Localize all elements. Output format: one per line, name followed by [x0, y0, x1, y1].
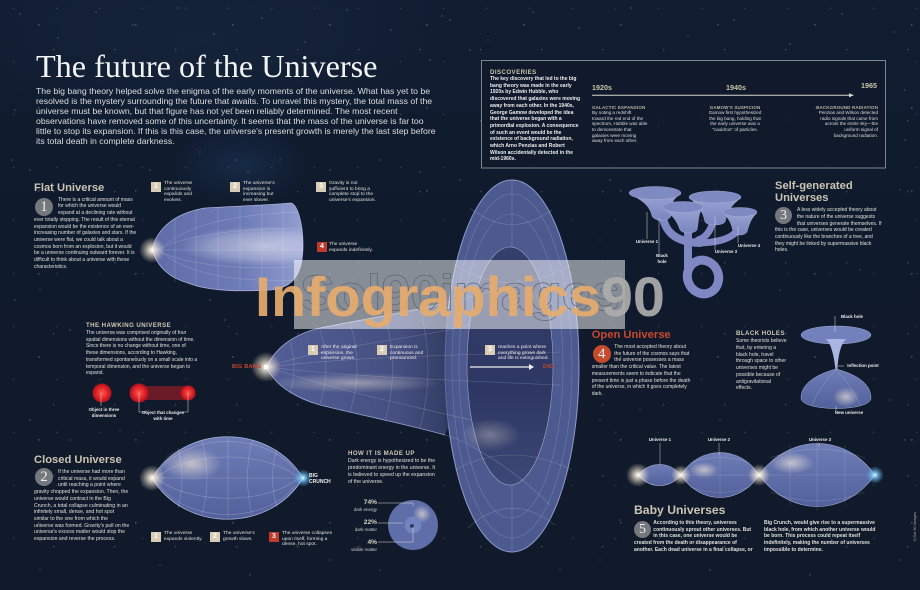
discoveries text	[490, 76, 580, 162]
flat text: There is a critical amount of mass	[58, 197, 133, 203]
galactic expansion	[592, 104, 648, 143]
intro text: The big bang theory helped solve the enigma of the early moments of the universe. What has yet to be	[36, 86, 430, 96]
flat universe diagram	[140, 202, 304, 292]
step 2 text: The universe's	[223, 531, 255, 536]
hawking text: temporal dimension, and the universe began to	[86, 364, 190, 370]
text: Some theorists believe	[736, 338, 787, 344]
text: antigravitational	[736, 378, 771, 384]
step 4 text: The universe	[329, 242, 357, 247]
big crunch label: BIG	[309, 473, 318, 479]
column 2: impossible to determine.	[764, 547, 823, 553]
universe 3: Universe 3	[809, 437, 831, 442]
stat 22: 22%	[364, 519, 377, 526]
black hole	[656, 253, 668, 264]
galactic expansion: spectrum, Hubble was able	[592, 121, 647, 126]
label: object that changes: with time	[153, 416, 173, 420]
text: dark.	[592, 391, 603, 397]
flat text: increasing number of galaxies and stars. If the	[34, 230, 136, 236]
gamow's suspicion: GAMOW'S SUSPICION	[710, 104, 760, 110]
panel: black holes text	[736, 330, 794, 392]
discoveries text: Wilson accidentally detected in the	[490, 150, 573, 156]
text: the universe possesses a mass	[614, 357, 684, 363]
panel: open universe text	[592, 329, 690, 397]
text: effects.	[736, 385, 752, 391]
flat text: expansion would be the existence of an ever-	[34, 224, 134, 230]
text: of the universe.	[348, 479, 383, 485]
galactic expansion: galaxies were moving	[592, 133, 636, 138]
step 1: 1	[154, 183, 158, 190]
step 4: 4	[320, 243, 324, 250]
hawking objects	[92, 384, 196, 412]
universe 1: Universe 1	[636, 239, 658, 244]
discoveries text: away from each other. In the 1940s,	[490, 103, 574, 109]
intro text: observations have removed some of this uncertainty. It seems that the mass of the universe is far too	[36, 116, 424, 126]
label: object that changes	[142, 410, 184, 420]
title: The future of the Universe	[36, 48, 377, 84]
step 2: 2	[233, 183, 237, 190]
flat text: characteristics.	[34, 264, 67, 270]
text: is believed to speed up the expansion	[348, 472, 435, 478]
end label: END	[543, 364, 554, 370]
discoveries text: bang theory was made in the early	[490, 83, 572, 89]
step 2 text	[223, 530, 255, 542]
text: Dark energy is hypothesized to be the	[348, 458, 435, 464]
heading: HOW IT IS MADE UP	[348, 450, 415, 457]
step 2	[230, 182, 240, 192]
arrow: open universe timeline	[470, 364, 534, 370]
closed heading: Closed Universe	[34, 454, 122, 466]
text: they might be linked by supermassive black	[775, 241, 871, 247]
stat 22	[354, 519, 377, 532]
column 2: be born. This process could repeat itself	[764, 533, 860, 539]
panel: closed universe text	[34, 454, 129, 542]
credit: ©Sol 90 Images	[912, 512, 917, 543]
flat text: difficult to think about a universe with these	[34, 257, 129, 263]
closed text: universe was formed. Gravity's pull on the	[34, 523, 129, 529]
gamow's suspicion	[708, 104, 762, 132]
step 3 text: dense, hot spot.	[282, 542, 317, 547]
universe 1: Universe 1	[649, 437, 671, 442]
step 2 text: Expansion is	[390, 345, 418, 350]
hawking text: The universe was comprised originally of four	[86, 330, 186, 336]
step 1 text	[164, 530, 203, 542]
stat 74: 74%	[364, 498, 377, 506]
universe 3: Universe 3	[715, 249, 737, 254]
column 1: in this case, one universe would be	[653, 533, 737, 539]
column 1: According to this theory, universes	[653, 520, 737, 526]
text: universes might be	[736, 365, 778, 371]
text: of the universe, in which it goes completely	[592, 384, 687, 390]
step 1	[151, 532, 161, 542]
step 1: 1	[154, 533, 158, 540]
panel: baby universes text	[634, 504, 884, 554]
composition sphere	[378, 500, 438, 550]
text: through space to other	[736, 358, 786, 364]
step 3: 3	[488, 346, 492, 353]
step 4	[317, 242, 327, 252]
step 3 text	[282, 530, 332, 547]
step 3 text: sufficient to bring a	[329, 187, 370, 192]
closed text	[34, 469, 129, 542]
intro text: universe must be known, but that figure has not yet been reliably determined. The most recent	[36, 106, 398, 116]
intro text: its total death in complete darkness.	[36, 136, 175, 146]
background radiation: across the entire sky—the	[825, 121, 878, 126]
step 2 text: ever slower.	[243, 198, 269, 203]
self-generated universes diagram	[629, 186, 757, 298]
discoveries text: existence of background radiation,	[490, 136, 573, 142]
step 2 text: increasing but	[243, 192, 273, 197]
stat 74	[354, 498, 377, 512]
step 4 text	[329, 242, 373, 253]
number 1: 1	[40, 199, 48, 215]
step 2 text: growth slows.	[223, 537, 253, 542]
step 3 text: Gravity is not	[329, 181, 358, 186]
heading	[775, 180, 853, 204]
hawking text: these dimensions, according to Hawking,	[86, 350, 177, 356]
text: predominant energy in the universe. It	[348, 465, 435, 471]
flat text: ever totally stopping. The result of this eternal	[34, 217, 135, 223]
self-generated diagram labels	[636, 239, 760, 264]
galactic expansion: toward the red end of the	[592, 116, 643, 121]
step 3 text: and life is extinguished.	[498, 356, 549, 361]
step 1 text: expands and	[164, 192, 192, 197]
number 5: 5	[639, 522, 646, 537]
step 3 text: reaches a point where	[498, 345, 546, 350]
number 5	[634, 521, 651, 538]
black hole labels	[830, 313, 890, 417]
discoveries text: mid-1960s.	[490, 156, 516, 162]
hawking heading: THE HAWKING UNIVERSE	[86, 322, 171, 329]
gamow's suspicion: "cauldron" of particles.	[712, 127, 758, 132]
panel: how it is made up	[348, 450, 436, 552]
step 2 text	[390, 344, 423, 361]
baby universes diagram	[626, 440, 884, 510]
closed steps	[151, 530, 332, 547]
baby universes labels	[640, 437, 840, 443]
text: that, by entering a	[736, 345, 776, 351]
background radiation: background radiation.	[834, 133, 878, 138]
step 1 text: evolves.	[164, 198, 182, 203]
big bang label: BIG BANG	[232, 364, 262, 370]
number 4	[593, 345, 611, 363]
black hole: Black hole	[841, 314, 863, 319]
panel: flat universe text	[34, 182, 136, 270]
closed text: universe's excess matter would stop the	[34, 529, 125, 535]
galactic expansion: GALACTIC EXPANSION	[592, 104, 645, 110]
heading: Universes	[775, 192, 828, 204]
column 1: continuously sprout other universes. But	[653, 527, 751, 533]
black hole: Black	[656, 253, 668, 258]
open universe steps	[308, 344, 549, 361]
closed text: Crunch, a total collapse culminating in an	[34, 503, 128, 509]
step 2 text	[243, 180, 275, 203]
label: object in three dimensions	[88, 407, 120, 418]
step 1	[151, 182, 161, 192]
column 1	[634, 520, 753, 554]
year 1920s: 1920s	[592, 82, 612, 92]
stat 74: dark energy	[354, 506, 377, 512]
galactic expansion: to demonstrate that	[592, 127, 632, 132]
closed text: similar to the one from which the	[34, 516, 108, 522]
step 3 text	[498, 344, 549, 361]
step 3: 3	[319, 183, 323, 190]
text: continuously like the branches of a tree, and	[775, 234, 873, 240]
closed text: If the universe had more than	[58, 469, 125, 475]
step 1 text: The universe	[164, 181, 192, 186]
discoveries text: 1920s by Edwin Hubble, who	[490, 89, 558, 95]
galactic expansion: away from each other.	[592, 138, 637, 143]
discoveries heading: DISCOVERIES	[490, 68, 537, 76]
intro text: resolved is the mystery surrounding the future that awaits. To unravel this mystery, the total mass of the	[36, 96, 432, 106]
background radiation: radio signals that came from	[820, 116, 878, 121]
closed text: universe would contract in the Big	[34, 496, 111, 502]
column 1: created from the death or disappearance of	[634, 540, 737, 546]
column 2	[764, 520, 875, 554]
galactic expansion: By noting a redshift	[592, 110, 631, 115]
step 1: 1	[311, 346, 315, 353]
black hole diagram	[801, 316, 871, 411]
background radiation: uniform signal of	[844, 127, 878, 132]
step 3 text	[329, 180, 376, 203]
text: The most accepted theory about	[614, 344, 686, 350]
number 2: 2	[40, 469, 48, 485]
number 3	[775, 207, 792, 224]
step 2 text: expansion is	[243, 187, 270, 192]
stat 4: 4%	[367, 538, 377, 546]
text: this is the case, universes would be created	[775, 227, 872, 233]
step 2	[210, 532, 220, 542]
step 3: 3	[272, 533, 276, 540]
text: present time is just a phase before the death	[592, 378, 690, 384]
gamow's suspicion: the big bang, holding that	[709, 116, 761, 121]
panel: hawking universe	[86, 322, 198, 420]
text	[348, 458, 436, 485]
step 3	[316, 182, 326, 192]
step 3 text: complete stop to the	[329, 192, 373, 197]
number 4: 4	[598, 346, 605, 362]
step 4 text: expands indefinitely.	[329, 248, 373, 253]
intro text	[36, 86, 436, 146]
step 1 text: expands violently.	[164, 537, 203, 542]
timeline arrow	[592, 93, 854, 97]
big crunch label: CRUNCH	[309, 479, 331, 485]
closed text: expansion and reverse the process.	[34, 536, 115, 542]
closed text: until reaching a point where	[58, 482, 121, 488]
flat steps	[151, 180, 376, 253]
closed universe diagram	[139, 437, 312, 519]
column 1: another. Each dead universe in a final collapse, or	[634, 547, 753, 553]
column 2: indefinitely, making the number of universes	[764, 540, 870, 546]
text: measurements seem to indicate that the	[592, 371, 681, 377]
hawking text: Since there is no change without time, one of	[86, 343, 186, 349]
text: A less widely accepted theory about	[797, 207, 876, 213]
text	[775, 207, 882, 253]
discoveries text: primordial explosion. A consequence	[490, 123, 579, 129]
label: object in three dimensions: Object in three	[89, 407, 119, 412]
gamow's suspicion: Gamow first hypothesized	[709, 110, 761, 115]
universe 2: Universe 2	[708, 437, 730, 442]
heading: Self-generated	[775, 180, 853, 192]
text: smaller than the critical value. The latest	[592, 364, 681, 370]
step 1	[308, 345, 318, 355]
text: that universes generate themselves. If	[797, 221, 882, 227]
closed text: gravity chopped the expansion. Then, the	[34, 489, 128, 495]
step 3	[485, 345, 495, 355]
text: black hole, travel	[736, 352, 774, 358]
label: object in three dimensions: dimensions	[92, 412, 116, 418]
stat 22: dark matter	[355, 527, 377, 532]
step 2 text: The universe's	[243, 181, 275, 186]
step 1 text: continuously	[164, 187, 191, 192]
hawking text: spatial dimensions without the dimension of time.	[86, 337, 195, 343]
step 3 text: universe's expansion.	[329, 198, 376, 203]
panel: self-generated universes text	[775, 180, 882, 253]
step 1 text: universe grows.	[321, 356, 355, 361]
discoveries text: George Gamow developed the idea	[490, 110, 573, 116]
discoveries text: that the universe began with a	[490, 116, 562, 122]
panel: discoveries	[490, 68, 878, 162]
text: possible because of	[736, 372, 780, 378]
hawking text: transformed spontaneously on a small scale into a	[86, 357, 197, 363]
inflection point: Inflection point	[847, 363, 879, 368]
intro text: little to stop its expansion. If this is this case, the universe's present growth is merely the last step before	[36, 126, 436, 136]
step 2: 2	[380, 346, 384, 353]
year 1965: 1965	[861, 80, 877, 90]
step 2: 2	[213, 533, 217, 540]
column 2: Big Crunch, would give rise to a supermassive	[764, 520, 875, 526]
step 3 text: upon itself, forming a	[282, 537, 327, 542]
discoveries text: The key discovery that led to the big	[490, 76, 576, 82]
discoveries text: discovered that galaxies were moving	[490, 96, 580, 102]
big crunch label	[309, 473, 331, 485]
flat text: cosmos born from an explosion, but it would	[34, 244, 132, 250]
watermark: Sol90images	[300, 265, 620, 321]
text	[736, 338, 787, 392]
step 1 text	[321, 344, 357, 361]
label: object that changes: Object that changes	[142, 410, 184, 415]
text	[592, 344, 690, 397]
step 2 text: pronounced.	[390, 356, 417, 361]
discoveries text: which Arno Penzias and Robert	[490, 143, 565, 149]
hawking text	[86, 330, 198, 376]
background radiation: BACKGROUND RADIATION	[816, 104, 878, 110]
closed text: infinitely small, dense, and hot spot	[34, 509, 114, 515]
background radiation: Penzias and Wilson detected	[819, 110, 878, 115]
discoveries text: of such an event would be the	[490, 130, 561, 136]
stat 4	[351, 538, 377, 552]
open universe diagram	[251, 180, 579, 552]
heading: BLACK HOLES	[736, 330, 785, 337]
step 1 text: After the original	[321, 345, 357, 350]
text: holes.	[775, 247, 788, 253]
step 1 text	[164, 180, 192, 203]
column 2: black hole, from which another universe would	[764, 527, 875, 533]
step 1 text: The universe	[164, 531, 192, 536]
step 3 text: everything grows dark	[498, 351, 546, 356]
flat heading: Flat Universe	[34, 182, 104, 194]
heading: Baby Universes	[634, 503, 725, 517]
text: the future of the cosmos says that	[614, 351, 689, 357]
new universe: New universe	[835, 410, 863, 415]
heading: Open Universe	[592, 329, 671, 341]
watermark: Infographics90	[255, 265, 665, 328]
black hole: hole	[657, 258, 667, 264]
number 3: 3	[780, 208, 787, 223]
background radiation	[816, 104, 878, 138]
number 2	[35, 468, 53, 486]
step 1 text: expansion, the	[321, 351, 353, 356]
flat text: universe were flat, we could talk about a	[34, 237, 123, 243]
flat text: be a universe continuing outward forever. It is	[34, 250, 135, 256]
text: the nature of the universe suggests	[797, 214, 875, 220]
gamow's suspicion: the early universe was a	[710, 121, 760, 126]
step 3 text: The universe collapses	[282, 531, 332, 536]
number 1	[35, 198, 53, 216]
step 2 text: continuous and	[390, 351, 423, 356]
flat text: expand at a declining rate without	[58, 210, 132, 216]
discoveries frame	[482, 60, 886, 168]
step 3	[269, 532, 279, 542]
flat text	[34, 197, 136, 270]
flat text: for which the universe would	[58, 203, 121, 209]
closed text: critical mass, it would expand	[58, 476, 125, 482]
stat 4: visible matter	[351, 546, 377, 552]
step 2	[377, 345, 387, 355]
universe 4: Universe 4	[738, 243, 760, 248]
hawking text: expand.	[86, 370, 104, 376]
year 1940s: 1940s	[726, 82, 746, 92]
